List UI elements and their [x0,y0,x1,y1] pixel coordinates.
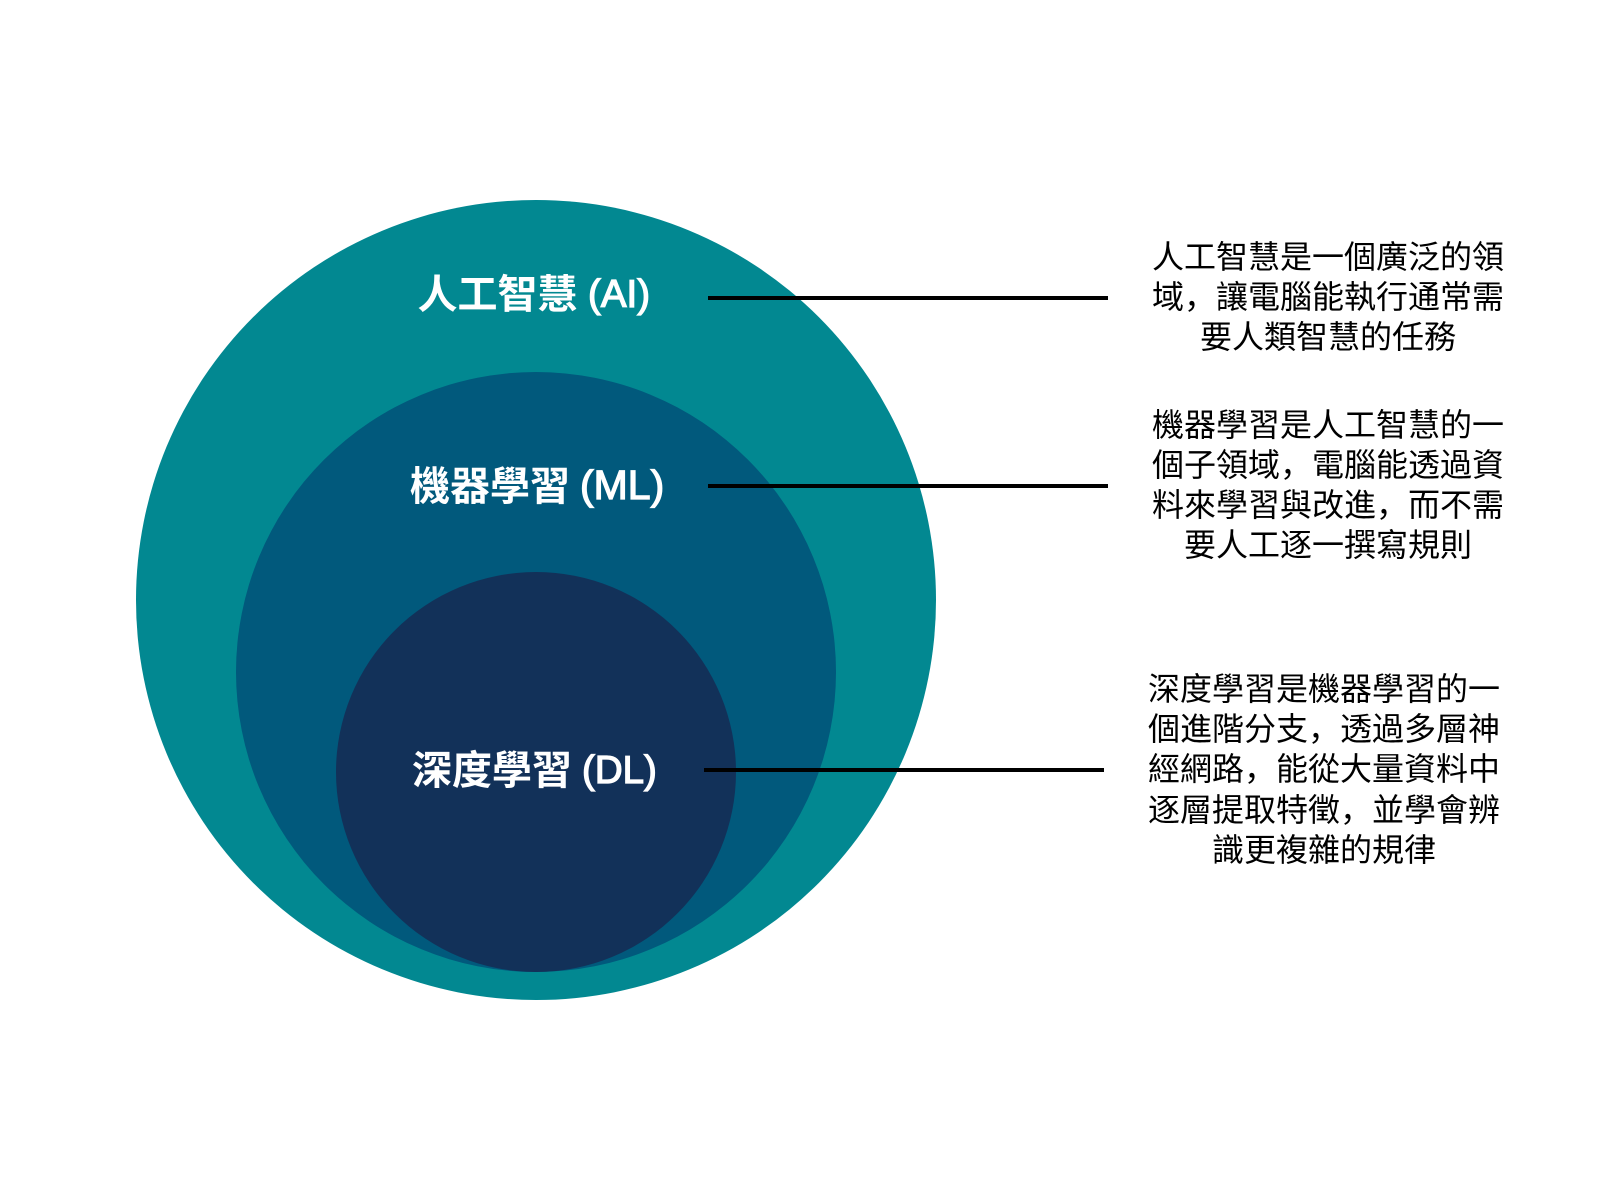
description: DL: 經網路，能從大量資料中 [1148,751,1500,787]
description: DL [1148,671,1500,868]
description: DL: 逐層提取特徵，並學會辨 [1148,792,1500,828]
connector line: DL [704,768,1104,772]
connector line: ML [708,484,1108,488]
description: AI: 域，讓電腦能執行通常需 [1152,279,1504,315]
description: AI: 人工智慧是一個廣泛的領 [1152,239,1504,275]
description: DL: 深度學習是機器學習的一 [1148,671,1500,707]
heading: ML: (ML) [580,462,664,508]
description: ML: 料來學習與改進，而不需 [1152,487,1504,523]
heading: DL: (DL) [582,749,657,792]
description: AI: 要人類智慧的任務 [1200,319,1456,355]
description: AI [1152,239,1504,355]
heading: AI: (AI) [588,273,650,316]
heading: ML: 機器學習 [410,454,570,512]
description: ML [1152,407,1504,563]
circle: deep learning [336,572,736,972]
description: ML: 機器學習是人工智慧的一 [1152,407,1504,443]
description: ML: 個子領域，電腦能透過資 [1152,447,1504,483]
nested circles diagram [136,200,936,1000]
description: DL: 個進階分支，透過多層神 [1148,711,1500,747]
description: ML: 要人工逐一撰寫規則 [1184,527,1472,563]
connector line: AI [708,296,1108,300]
description: DL: 識更複雜的規律 [1212,832,1436,868]
circle: artificial intelligence [136,200,936,1000]
heading: DL: 深度學習 [412,738,572,796]
heading: AI: 人工智慧 [418,262,578,320]
circle: machine learning [236,372,836,972]
